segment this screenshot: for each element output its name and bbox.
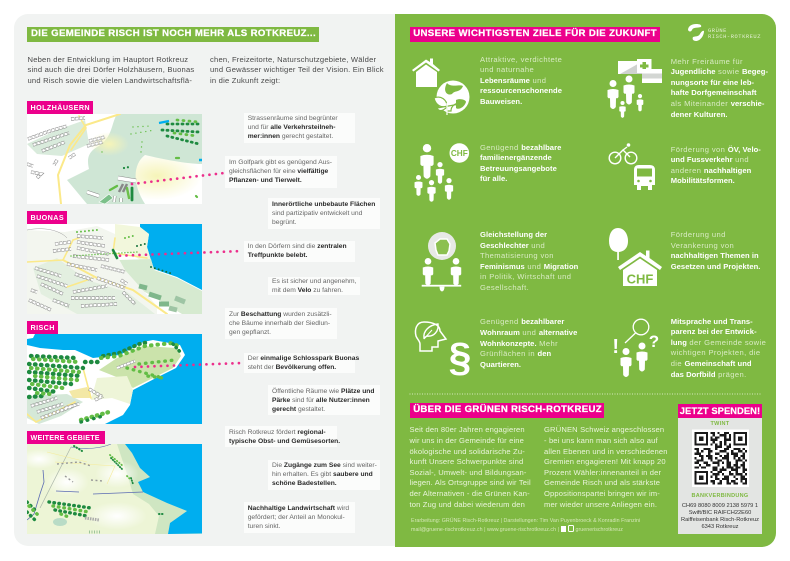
text block: about column 2: Oppositionspartei bringen wir im- bbox=[544, 489, 660, 498]
goal text: Mitsprache: wichtigen Projekten, die bbox=[671, 348, 760, 357]
callout: Strassenräume: mer:innen gerecht gestaltet. bbox=[248, 133, 333, 140]
callout: Landwirtschaft: Nachhaltige Landwirtschaft wird bbox=[248, 505, 349, 512]
icon: family and CHF bbox=[415, 143, 469, 202]
callout: Beschattung: che Bäume innerhalb der Siedlun- bbox=[229, 320, 330, 327]
text block: intro column 1: und Risch sowie die vielen Landwirtschaftsflä- bbox=[28, 76, 192, 85]
goal text: Wohnraum: Grünflächen in den bbox=[480, 349, 551, 358]
text block: about column 2: Gremien engagieren! Mit knapp 20 bbox=[544, 457, 666, 466]
callout: Landwirtschaft bbox=[244, 502, 355, 533]
callout: Velo bbox=[268, 277, 360, 295]
text block: intro column 2: in die Zukunft zeigt: bbox=[210, 76, 280, 85]
text block: bank details: 6343 Rotkreuz bbox=[701, 524, 738, 530]
goal text: Mobilität bbox=[671, 145, 761, 185]
goal text: Mitsprache: lung der Gemeinde sowie bbox=[671, 338, 766, 347]
text block: intro column 2: chen, Freizeitorte, Naturschutzgebiete, Wälder bbox=[210, 55, 376, 64]
text block: bank details: Swift/BIC RAIFCH22E60 bbox=[689, 510, 751, 516]
text block: about column 1: wir uns in der Gemeinde für eine bbox=[410, 436, 524, 445]
goal text: Lebensräume: und naturnahe bbox=[480, 65, 534, 74]
goal text: Wohnraum: Quartieren. bbox=[480, 360, 521, 369]
text block: about column 1: ökologische und solidarische Zu- bbox=[410, 447, 525, 456]
goal text: Gleichstellung bbox=[480, 230, 578, 292]
goal text: Betreuung: familienergänzende bbox=[480, 153, 552, 162]
icon: head with leaf and paragraph: § bbox=[449, 334, 471, 380]
goal text: Mitsprache: die Gemeinschaft und bbox=[671, 359, 752, 368]
text block: intro column 1 bbox=[28, 55, 194, 85]
heading: right title: UNSERE WICHTIGSTEN ZIELE FÜR DIE ZUKUNFT bbox=[413, 28, 657, 39]
callout: Landwirtschaft: turen sinkt. bbox=[248, 523, 280, 530]
goal text: Betreuung: für alle. bbox=[480, 174, 507, 183]
callout: Velo: Es ist sicher und angenehm, bbox=[272, 278, 356, 285]
callout: Innerörtliche Flächen: begrünt. bbox=[272, 219, 297, 226]
logo: Grüne Risch-Rotkreuz bbox=[688, 24, 761, 41]
goal text: Mitsprache: parenz bei der Entwick- bbox=[671, 327, 757, 336]
goal text: Freiräume: dener Kulturen. bbox=[671, 110, 728, 119]
label: Holzhäusern: HOLZHÄUSERN bbox=[30, 103, 90, 112]
goal text: Gleichstellung: Gesellschaft. bbox=[480, 283, 529, 292]
label: Holzhäusern bbox=[27, 101, 93, 114]
text block: bank details: Raiffeisenbank Risch-Rotkreuz bbox=[681, 517, 759, 523]
goal text: Wohnraum: Wohnkonzepte. Mehr bbox=[480, 339, 558, 348]
icon: house and globe bbox=[412, 58, 470, 115]
goal text: Wohnraum bbox=[480, 317, 578, 369]
callout: Innerörtliche Flächen bbox=[268, 198, 380, 229]
goal text: Gleichstellung: Gleichstellung der bbox=[480, 230, 547, 239]
text block: about column 1: der Alternativen - die Grünen Kan- bbox=[410, 489, 530, 498]
text block: about column 2: - bei uns kann man sich also auf bbox=[544, 436, 658, 445]
callout: Velo: mit dem Velo zu fahren. bbox=[272, 287, 343, 294]
goal text: Mobilität: Förderung von ÖV, Velo- bbox=[671, 145, 761, 154]
map: Risch bbox=[27, 334, 202, 424]
text block: about column 2: Gemeinde Risch und als stärkste bbox=[544, 478, 660, 487]
goal text: Freiräume: hafte Dorfgemeinschaft bbox=[671, 88, 757, 97]
callout: Obst- und Gemüsesorten bbox=[225, 426, 337, 447]
goal text: Gleichstellung: Thematisierung von bbox=[480, 251, 554, 260]
callout: Schlosspark: steht der Bevölkerung offen. bbox=[248, 364, 336, 371]
goal text: Mobilität: Mobilitätsformen. bbox=[671, 176, 735, 185]
icon: tree and CHF house: CHF bbox=[627, 272, 653, 286]
text block: intro column 2: und Gewässer wichtiger Teil der Vision. Ein Blick bbox=[210, 65, 384, 74]
text block: about column 2: allen Ebenen und in verschiedenen bbox=[544, 447, 668, 456]
callout: Golfpark: Pflanzen- und Tierwelt. bbox=[229, 177, 302, 184]
goal text: Wohnraum: Wohnraum und alternative bbox=[480, 328, 577, 337]
callout: Innerörtliche Flächen: sind partizipativ entwickelt und bbox=[272, 210, 362, 217]
label: Weitere Gebiete bbox=[27, 431, 104, 444]
callout: Öffentliche Räume: gerecht gestaltet. bbox=[272, 406, 325, 412]
label: Buonas: BUONAS bbox=[30, 213, 64, 222]
callout: Beschattung bbox=[225, 308, 337, 339]
callout: Treffpunkte: In den Dörfern sind die zentralen bbox=[248, 243, 347, 250]
goal text: Betreuung: Genügend bezahlbare bbox=[480, 143, 561, 152]
icon: magnifier with people: ? bbox=[649, 332, 659, 351]
text block: about column 1 bbox=[410, 425, 531, 509]
map: Buonas bbox=[27, 224, 202, 314]
QR code bbox=[692, 430, 749, 487]
text block: intro column 1: Neben der Entwicklung im Hauptort Rotkreuz bbox=[28, 55, 188, 64]
goal text: Nachhaltige Themen: Verankerung von bbox=[671, 241, 734, 250]
callout: Zugänge zum See: Die Zugänge zum See sind weiter- bbox=[272, 462, 377, 469]
callout: Schlosspark: Der einmalige Schlosspark Buonas bbox=[248, 355, 359, 362]
callout: Golfpark bbox=[225, 156, 337, 188]
callout: Öffentliche Räume bbox=[268, 385, 380, 415]
goal text: Betreuung: Betreuungsangebote bbox=[480, 164, 557, 173]
text block: credits: mail@gruene-rischrotkreuz.ch | www.gruene-rischrotkreuz.ch | gruenerischrotkreuz bbox=[411, 527, 623, 533]
callout: Obst- und Gemüsesorten: typische Obst- und Gemüsesorten. bbox=[229, 438, 340, 444]
icon: bicycle and bus bbox=[609, 143, 655, 190]
icon: tree and CHF house bbox=[609, 228, 662, 286]
goal text: Nachhaltige Themen: Gesetzen und Projekten. bbox=[671, 262, 760, 271]
goal text: Mitsprache: Mitsprache und Trans- bbox=[671, 317, 753, 326]
goal text: Freiräume bbox=[670, 57, 768, 119]
panel: left grey background bbox=[14, 14, 395, 546]
callout: Zugänge zum See bbox=[268, 460, 380, 490]
goal text: Lebensräume: Lebensräume und bbox=[480, 76, 546, 85]
map: Holzhäusern bbox=[27, 114, 202, 204]
heading: about: ÜBER DIE GRÜNEN RISCH-ROTKREUZ bbox=[413, 404, 602, 415]
callout: Innerörtliche Flächen: Innerörtliche unbebaute Flächen bbox=[272, 201, 375, 208]
label: Buonas bbox=[27, 211, 66, 224]
goal text: Lebensräume: Attraktive, verdichtete bbox=[480, 55, 562, 64]
text block: credits bbox=[411, 518, 640, 533]
goal text: Freiräume: nungsorte für eine leb- bbox=[671, 78, 754, 87]
text block: credits: Erarbeitung: GRÜNE Risch-Rotkreuz | Darstellungen: Tim Van Puyenbroeck & Konradin Franzini bbox=[411, 518, 640, 524]
goal text: Lebensräume bbox=[480, 55, 562, 106]
heading: Jetzt spenden: JETZT SPENDEN! bbox=[680, 405, 760, 416]
label: Risch bbox=[27, 321, 58, 334]
panel: Jetzt spenden bbox=[678, 404, 762, 534]
goal text: Gleichstellung: Geschlechter und bbox=[480, 241, 545, 250]
callout: Schlosspark bbox=[244, 353, 355, 373]
text block: about column 1: Seit den 80er Jahren engagieren bbox=[410, 425, 525, 434]
callout: Strassenräume: und für alle Verkehrsteilneh- bbox=[248, 124, 335, 131]
text block: bank details: CH69 8080 8009 2138 5979 1 bbox=[682, 502, 758, 508]
goal text: Mitsprache bbox=[670, 317, 766, 379]
goal text: Gleichstellung: in Politik, Wirtschaft und bbox=[480, 272, 571, 281]
goal text: Lebensräume: ressourcenschonende bbox=[480, 86, 562, 95]
text block: intro column 1: sind auch die drei Dörfer Holzhäusern, Buonas bbox=[28, 65, 194, 74]
callout: Öffentliche Räume: Öffentliche Räume wie Plätze und bbox=[272, 388, 374, 394]
callout: Landwirtschaft: gefördert; der Anteil an Monokul- bbox=[248, 514, 345, 521]
callout: Golfpark: Im Golfpark gibt es genügend Aus- bbox=[229, 159, 332, 166]
callout: Beschattung: gen gepflanzt. bbox=[229, 329, 271, 336]
goal text: Betreuung bbox=[480, 143, 562, 183]
callout: Zugänge zum See: schöne Badestellen. bbox=[272, 480, 337, 487]
heading: left title: DIE GEMEINDE RISCH IST NOCH MEHR ALS ROTKREUZ... bbox=[31, 28, 316, 39]
callout: Strassenräume: Strassenräume sind begrünter bbox=[248, 115, 338, 122]
label: Risch: RISCH bbox=[30, 323, 55, 332]
text block: about column 2: mer wieder unsere Anliegen ein. bbox=[544, 500, 657, 509]
goal text: Mitsprache: das Dorfbild prägen. bbox=[671, 370, 747, 379]
goal text: Freiräume: als Miteinander verschie- bbox=[671, 99, 765, 108]
goal text: Nachhaltige Themen bbox=[670, 230, 760, 271]
text block: about column 1: ton Zug und dabei wiederum den bbox=[410, 500, 525, 509]
goal text: Gleichstellung: Feminismus und Migration bbox=[480, 262, 578, 271]
text block: bank details bbox=[681, 502, 759, 530]
goal text: Freiräume: Mehr Freiräume für bbox=[671, 57, 743, 66]
text block: about column 2: Prozent Wähler:innenanteil in der bbox=[544, 468, 661, 477]
text block: about column 2: GRÜNEN Schweiz angeschlossen bbox=[544, 425, 664, 434]
icon: magnifier with people: ! bbox=[612, 336, 619, 358]
logo: Grüne Risch-Rotkreuz: GRÜNE bbox=[708, 28, 727, 34]
callout: Öffentliche Räume: Pärke sind für alle Nutzer:innen bbox=[272, 396, 370, 404]
callout: Treffpunkte: Treffpunkte belebt. bbox=[248, 252, 308, 259]
icon: fist and balance bbox=[422, 232, 461, 292]
text block: about column 1: Sozial-, Umwelt- und Bildungsan- bbox=[410, 468, 527, 477]
callout: Treffpunkte bbox=[244, 241, 355, 262]
label: Twint: TWINT bbox=[711, 420, 729, 426]
text block: intro column 2 bbox=[210, 55, 384, 85]
icon: head with leaf and paragraph bbox=[415, 322, 471, 380]
map: Weitere Gebiete bbox=[27, 444, 202, 534]
goal text: Mobilität: anderen nachhaltigen bbox=[671, 166, 751, 175]
goal text: Lebensräume: Bauweisen. bbox=[480, 97, 522, 106]
callout: Obst- und Gemüsesorten: Risch Rotkreuz fördert regional- bbox=[229, 428, 326, 436]
logo: Grüne Risch-Rotkreuz: RISCH-ROTKREUZ bbox=[708, 34, 761, 40]
icon: magnifier with people bbox=[612, 319, 659, 377]
icon: flags and people bbox=[608, 59, 662, 118]
goal text: Freiräume: Jugendliche sowie Begeg- bbox=[671, 67, 768, 76]
callout: Zugänge zum See: hin erhalten. Es gibt saubere und bbox=[272, 471, 373, 478]
panel: right green background bbox=[395, 14, 776, 547]
icon: family and CHF: CHF bbox=[451, 149, 468, 158]
callout: Strassenräume bbox=[244, 113, 355, 143]
goal text: Nachhaltige Themen: nachhaltigen Themen in bbox=[671, 251, 759, 260]
goal text: Wohnraum: Genügend bezahlbarer bbox=[480, 317, 564, 326]
label: Bankverbindung: BANKVERBINDUNG bbox=[691, 493, 749, 499]
label: Weitere Gebiete: WEITERE GEBIETE bbox=[30, 433, 100, 442]
text block: about column 1: kunft Unsere Schwerpunkte sind bbox=[410, 457, 523, 466]
text block: about column 2 bbox=[544, 425, 668, 509]
callout: Golfpark: gleichsflächen für eine vielfältige bbox=[229, 168, 328, 175]
goal text: Nachhaltige Themen: Förderung und bbox=[671, 230, 726, 239]
divider: white dotted line bbox=[410, 393, 762, 395]
text block: about column 1: liegen. Als Ortsgruppe sind wir Teil bbox=[410, 478, 531, 487]
callout: Beschattung: Zur Beschattung wurden zusätzli- bbox=[229, 311, 332, 318]
goal text: Mobilität: und Fussverkehr und bbox=[671, 155, 749, 164]
